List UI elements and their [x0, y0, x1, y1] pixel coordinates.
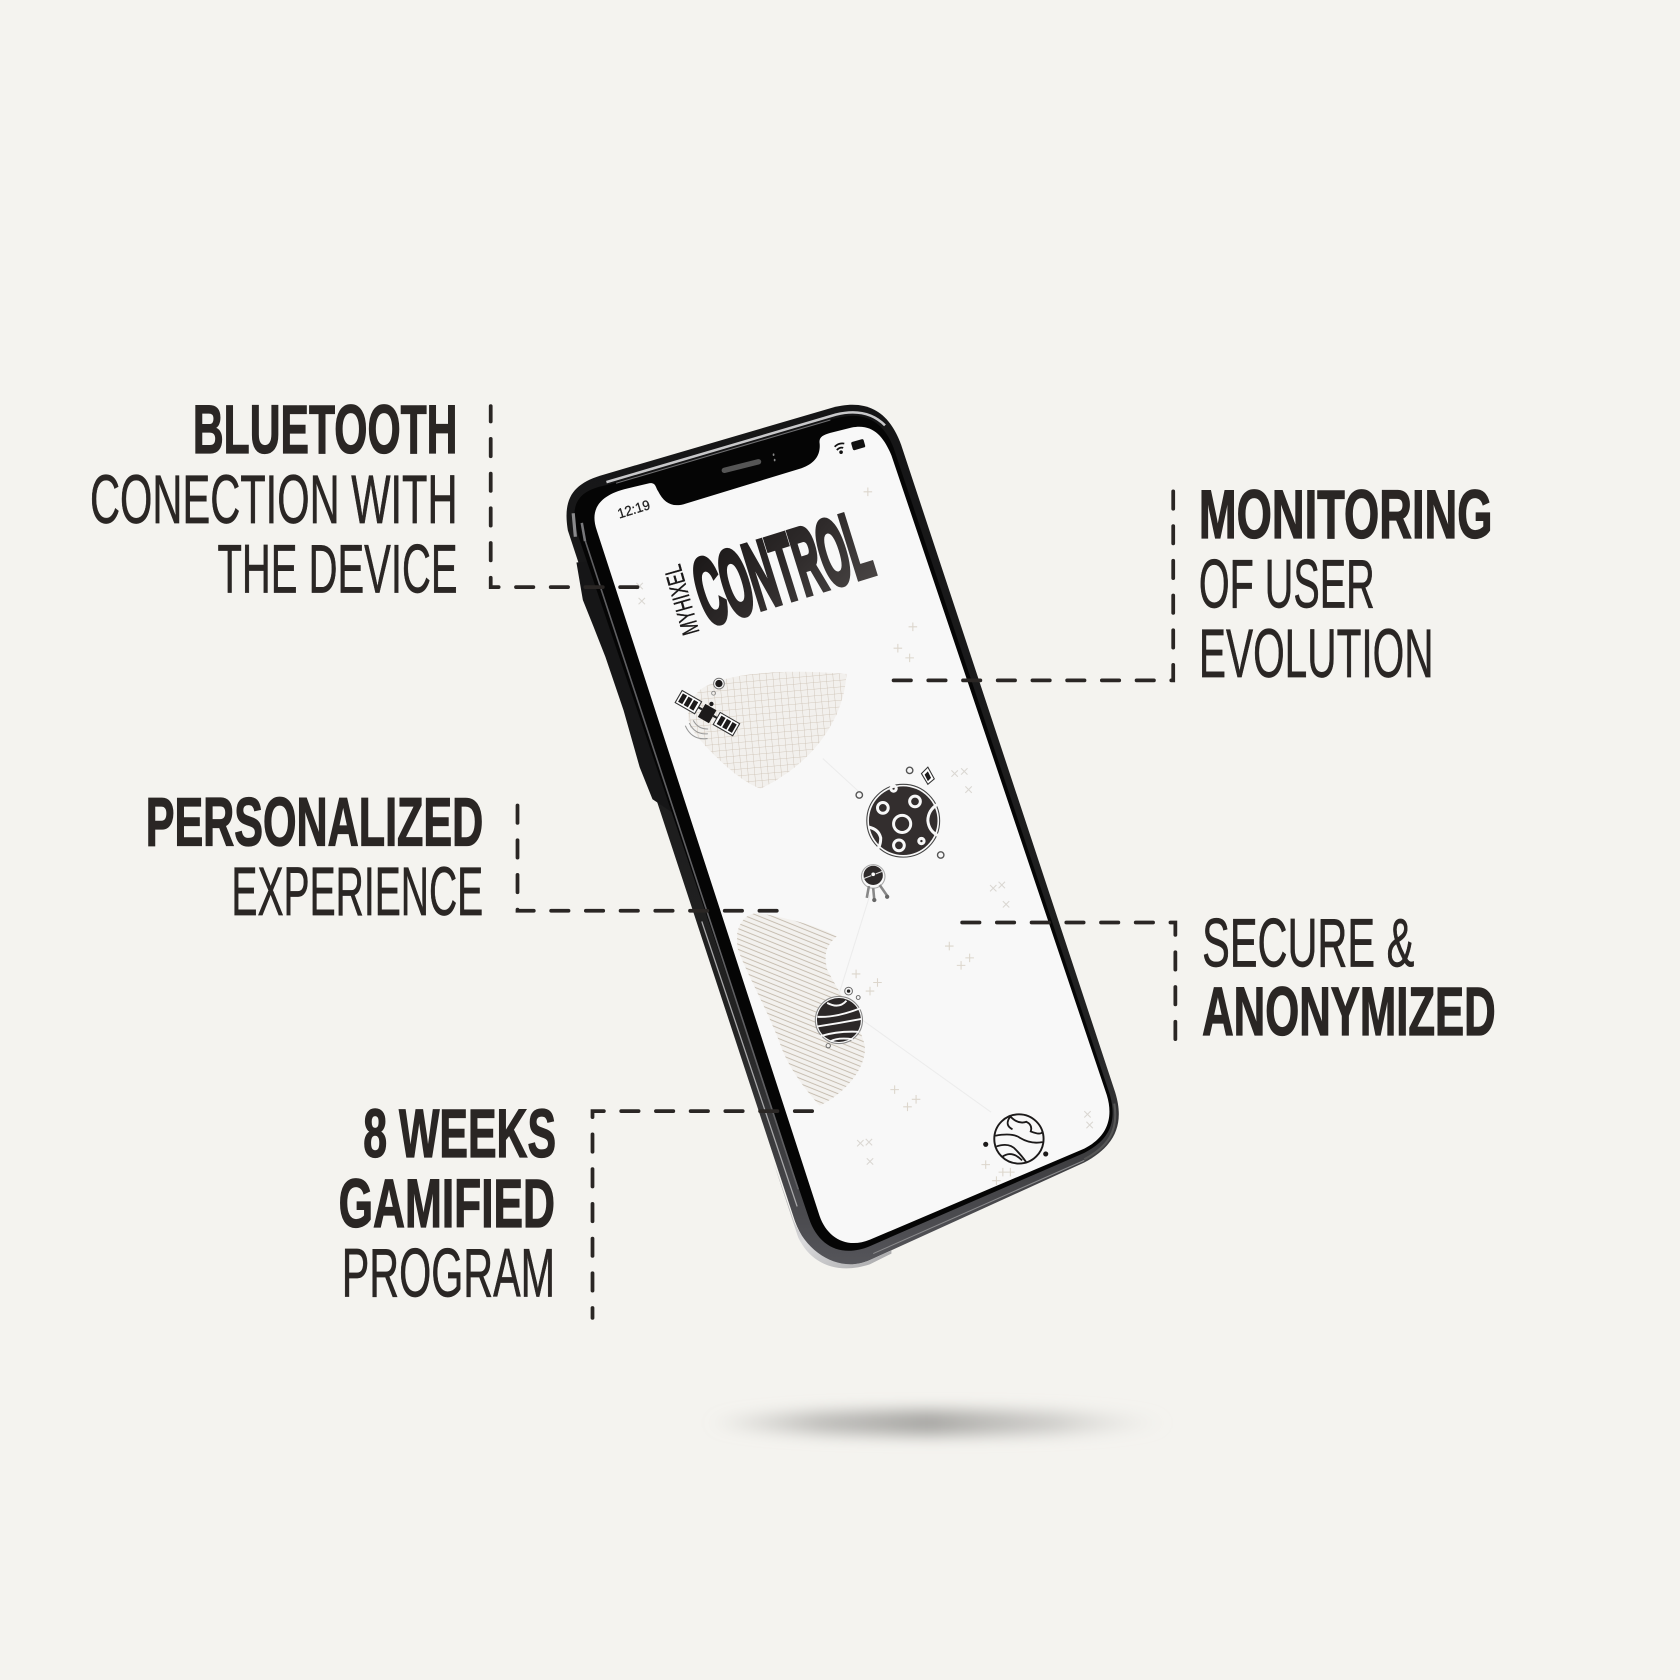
earpiece speaker [724, 462, 759, 470]
satellite beacon [709, 678, 724, 706]
screen [594, 427, 1109, 1243]
label: 8 weeks: PROGRAM [342, 1234, 555, 1311]
label: 8 weeks: GAMIFIED [339, 1165, 555, 1242]
striped map region [737, 913, 865, 1106]
label: 8 weeks: 8 WEEKS [363, 1095, 556, 1172]
label: bluetooth: THE DEVICE [218, 530, 458, 608]
decorative stars [852, 488, 1015, 1185]
screen bezel [574, 416, 1113, 1251]
front camera dots [774, 454, 775, 460]
connector: bluetooth [491, 406, 638, 587]
satellite [665, 690, 740, 753]
connector: secure [962, 922, 1175, 1039]
MYHIXEL label: MYHIXEL [660, 561, 705, 638]
faint path lines [823, 759, 991, 1112]
label: personalized [146, 783, 483, 930]
label: bluetooth: BLUETOOTH [193, 391, 458, 468]
phone body [567, 405, 1119, 1265]
label: secure: ANONYMIZED [1202, 973, 1496, 1050]
silver lower corner [774, 1162, 891, 1268]
grid map region [688, 672, 846, 789]
label: personalized: PERSONALIZED [146, 783, 483, 860]
smartphone: CONTROL [682, 492, 883, 645]
side buttons [576, 557, 675, 814]
label: bluetooth [90, 391, 458, 608]
label: bluetooth: CONECTION WITH [90, 461, 458, 538]
status bar time: 12:19 [615, 496, 652, 521]
connector: monitoring [894, 491, 1173, 680]
label: monitoring: MONITORING [1199, 476, 1492, 553]
connector: 8 weeks [592, 1111, 812, 1318]
striped planet [815, 987, 862, 1048]
infographic canvas [92, 404, 1494, 1444]
label: secure [1202, 904, 1496, 1050]
outlined planet [983, 1114, 1048, 1164]
label: monitoring [1199, 476, 1492, 692]
connector: personalized [518, 804, 777, 911]
frame highlights [573, 412, 1115, 1254]
label: monitoring: EVOLUTION [1199, 615, 1434, 692]
battery icon [851, 439, 866, 451]
floating phone shadow [707, 1410, 1168, 1436]
label: personalized: EXPERIENCE [231, 853, 483, 930]
astronaut probe [861, 865, 889, 902]
label: 8 weeks [339, 1095, 556, 1311]
smartphone [567, 405, 1119, 1268]
label: monitoring: OF USER [1199, 545, 1375, 622]
label: secure: SECURE & [1202, 904, 1414, 981]
wifi icon [835, 443, 844, 453]
cratered planet [856, 767, 944, 858]
